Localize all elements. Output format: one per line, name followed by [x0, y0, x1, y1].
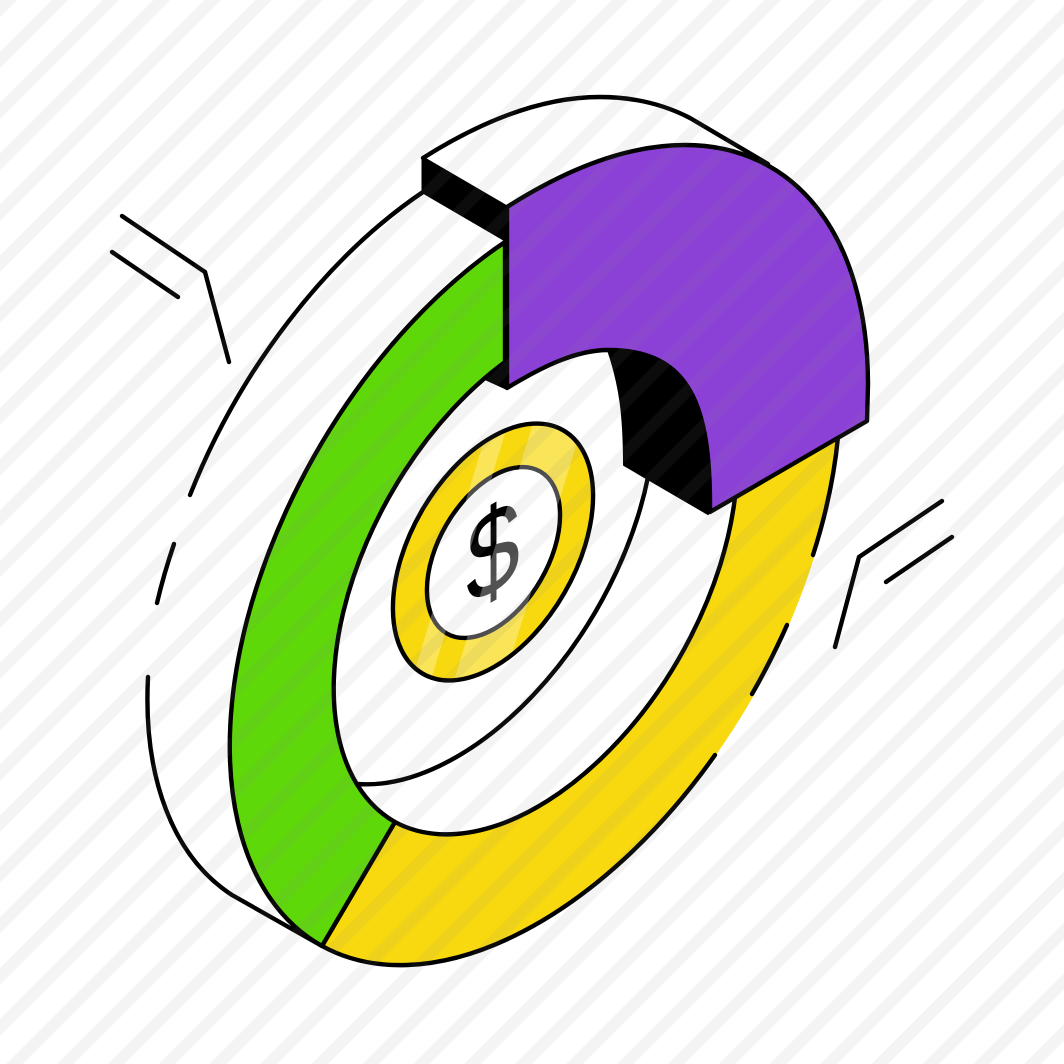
back outline of the disc: [147, 97, 768, 946]
black inner wall of the purple segment: [608, 350, 710, 514]
coin highlights: [416, 426, 576, 678]
accent lines: upper left: [112, 216, 229, 362]
green segment: [230, 242, 505, 946]
dollar coin: [390, 421, 596, 683]
purple segment: [507, 145, 868, 512]
black notch under the green segment: [485, 362, 507, 389]
inner back arc: [357, 477, 648, 784]
dollar sign: $: [466, 468, 520, 634]
accent lines: right: [835, 501, 952, 647]
yellow segment: [322, 437, 838, 965]
black side wall behind the purple segment top: [423, 158, 507, 241]
